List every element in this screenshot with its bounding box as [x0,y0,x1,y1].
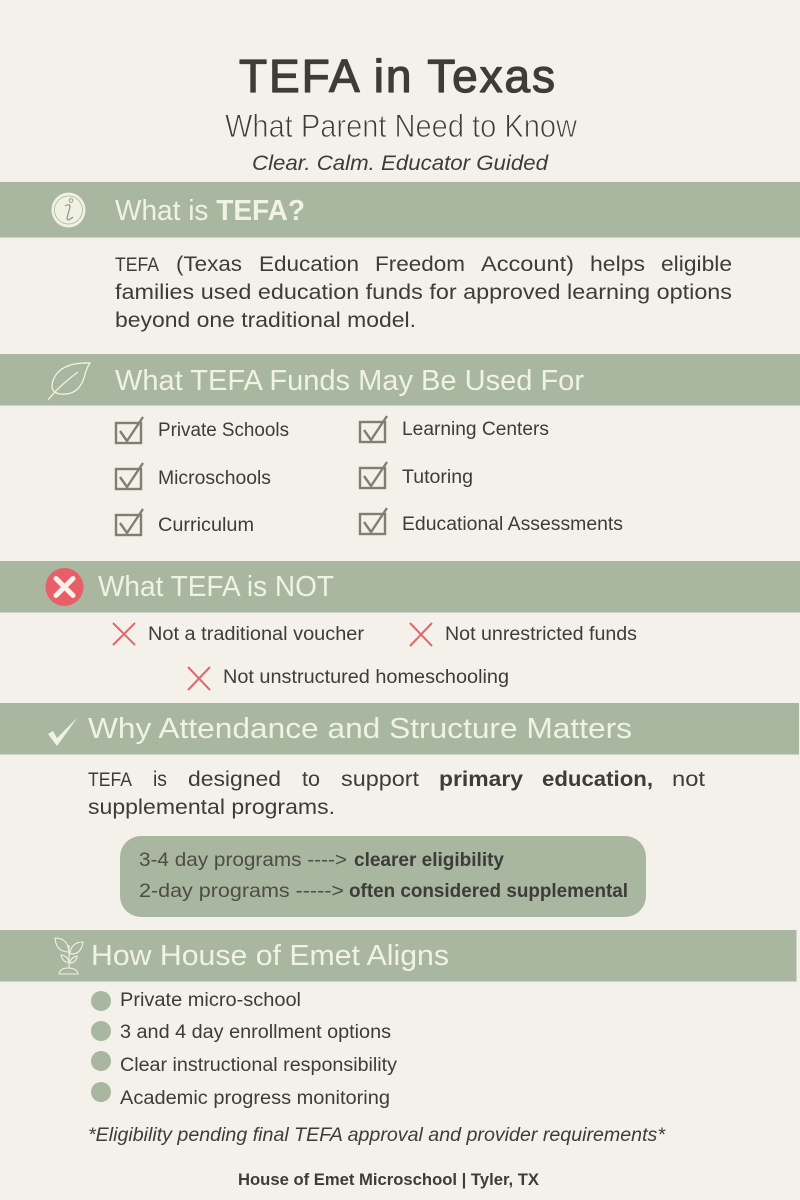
paragraph: Education [259,252,359,276]
panel: attendance and structure [0,703,799,917]
footnote: *Eligibility pending final TEFA approval and provider requirements* [88,1125,666,1146]
section band [0,703,799,754]
heading: What TEFA is NOT [98,571,334,603]
bullet list: 3 and 4 day enrollment options [120,1022,391,1043]
icon: info [52,192,86,228]
panel: funds uses [0,354,800,536]
icon: plant [55,938,83,974]
heading: Why Attendance and Structure Matters [88,713,632,745]
not list: Not a traditional voucher [148,624,365,645]
paragraph: eligible [661,252,732,276]
callout: 2-day programs -----> [139,881,344,902]
checklist: Curriculum [158,515,254,536]
title: TEFA in Texas [239,50,555,102]
panel: what TEFA is not [0,561,800,690]
not list [113,623,637,690]
panel: House of Emet [0,930,796,1189]
paragraph: education, [542,767,653,791]
paragraph: to [302,767,320,791]
paragraph [88,767,705,819]
bullet list: Clear instructional responsibility [120,1055,398,1076]
paragraph: supplemental programs. [88,795,335,819]
callout [120,836,646,917]
paragraph: not [672,767,705,791]
checklist: Tutoring [402,467,473,488]
callout: often considered supplemental [349,881,628,902]
footer: House of Emet Microschool | Tyler, TX [238,1170,540,1189]
subtitle: What Parent Need to Know [225,108,578,144]
icon: red x [46,568,84,606]
section band [0,561,800,612]
checklist [116,416,623,536]
paragraph: families used education funds for approved learning options [115,280,732,304]
paragraph: designed [188,767,281,791]
paragraph: Account) [481,252,574,276]
checklist: Learning Centers [402,419,549,440]
paragraph: Freedom [375,252,465,276]
heading: What TEFA Funds May Be Used For [115,365,584,397]
paragraph: support [341,767,419,791]
icon: check [48,717,78,746]
paragraph: helps [590,252,645,276]
callout: clearer eligibility [354,850,504,871]
paragraph: beyond one traditional model. [115,308,416,332]
heading: How House of Emet Aligns [91,940,449,972]
icon: leaf [48,363,90,400]
paragraph: TEFA [115,254,159,276]
heading: What is TEFA? [115,195,305,227]
not list: Not unrestricted funds [445,624,637,645]
bullet list [91,990,398,1109]
not list: Not unstructured homeschooling [223,667,509,688]
checklist: Educational Assessments [402,514,623,535]
panel: what is TEFA [0,182,800,332]
section band [0,354,800,406]
paragraph: is [153,767,167,791]
checklist: Private Schools [158,420,289,441]
paragraph: primary [439,767,523,791]
bullet list: Private micro-school [120,990,301,1011]
callout: 3-4 day programs ----> [139,850,347,871]
section band [0,182,800,238]
paragraph [115,252,732,332]
paragraph: TEFA [88,769,132,791]
checklist: Microschools [158,468,271,489]
tagline: Clear. Calm. Educator Guided [252,151,549,175]
paragraph: (Texas [176,252,242,276]
section band [0,930,796,982]
bullet list: Academic progress monitoring [120,1088,390,1109]
